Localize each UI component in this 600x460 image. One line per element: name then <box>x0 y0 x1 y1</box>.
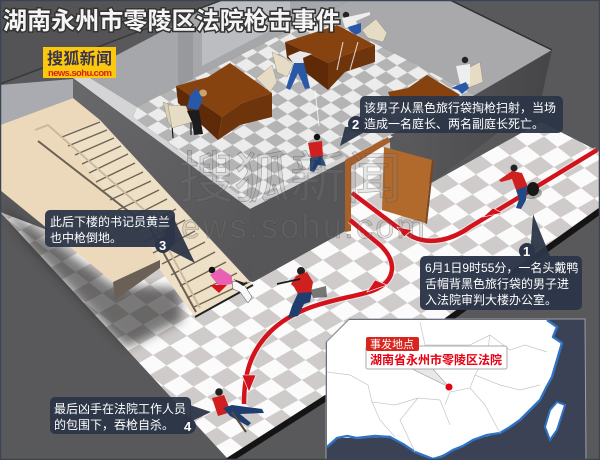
desk right <box>285 25 375 90</box>
callout 3 <box>45 210 195 263</box>
person: blue officer at left desk <box>187 88 207 135</box>
coastline <box>327 320 562 459</box>
title: 湖南永州市零陵区法院枪击事件 <box>3 7 340 35</box>
watermark: news.sohu.com <box>160 208 425 246</box>
callout 3: 3 <box>159 238 166 253</box>
chairs <box>163 19 483 138</box>
callout 4: 的包围下，吞枪自杀。 <box>54 417 174 432</box>
person: clerk Huang Lan fallen on stairs <box>209 267 252 303</box>
callout 1: 舌帽背黑色旅行袋的男子进 <box>425 276 569 291</box>
logo: 搜狐新闻 <box>47 49 112 68</box>
callout 2: 2 <box>352 117 359 132</box>
watermark: 搜狐新闻 <box>178 147 402 210</box>
callout 2: 该男子从黑色旅行袋掏枪扫射，当场 <box>364 100 556 115</box>
callout 4: 最后凶手在法院工作人员 <box>54 402 186 416</box>
desk left <box>176 63 272 140</box>
person: officer at right desk <box>286 51 312 90</box>
back walls <box>0 0 552 125</box>
red route <box>242 150 597 404</box>
person: white shirt at third desk <box>451 57 470 94</box>
lower floor <box>0 122 600 460</box>
callout 2: 造成一名庭长、两名副庭长死亡。 <box>364 116 544 131</box>
callout 4 <box>50 397 211 434</box>
gunfire traces <box>315 42 358 126</box>
red tag: 事发地点 <box>370 337 414 351</box>
province borders <box>327 322 547 452</box>
person: gunman with rifle <box>277 267 327 318</box>
person: white shirt at top <box>342 12 370 35</box>
location label text: 湖南省永州市零陵区法院 <box>370 352 502 367</box>
person: gunman entering with bag <box>499 164 542 209</box>
person: gunman in office <box>308 134 326 172</box>
logo: news.sohu.com <box>48 68 112 79</box>
location label tail <box>410 368 449 387</box>
callout 3: 也中枪倒地。 <box>50 230 122 245</box>
watermark <box>160 147 425 246</box>
person: gunman dead <box>212 388 264 432</box>
map panel <box>326 319 586 460</box>
callout 1: 6月1日9时55分，一名头戴鸭 <box>425 260 578 275</box>
callout 1: 入法院审判大楼办公室。 <box>425 292 557 307</box>
map land <box>327 320 562 459</box>
location marker <box>446 384 452 390</box>
logo <box>43 47 116 79</box>
callout 1: 1 <box>523 244 530 259</box>
door and frame <box>345 137 434 232</box>
taiwan <box>545 402 565 440</box>
location label <box>366 346 507 369</box>
callout 3: 此后下楼的书记员黄兰 <box>50 214 170 229</box>
desk lower right <box>388 75 460 110</box>
callout 4: 4 <box>184 419 192 434</box>
upper floor <box>73 15 475 209</box>
callout 1 <box>420 214 582 310</box>
stairs and landing <box>0 98 253 317</box>
callout 2 <box>340 96 563 146</box>
building front walls <box>73 50 552 282</box>
